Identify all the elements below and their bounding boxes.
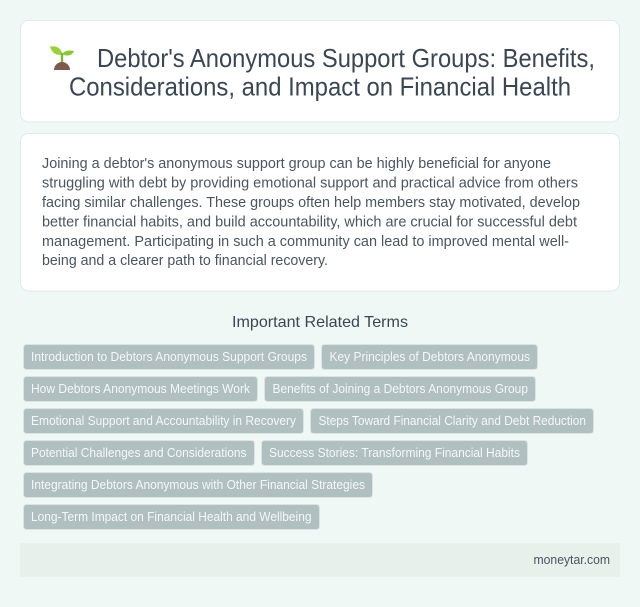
tag list: Long-Term Impact on Financial Health and Wellbeing — [31, 510, 312, 524]
panel: title card — [20, 20, 620, 122]
text block: description: struggling with debt by providing emotional support and practical advice from others — [42, 176, 578, 192]
heading: related terms: Important Related Terms — [232, 314, 408, 331]
tag list: Potential Challenges and Considerations — [31, 446, 246, 460]
text block: description: management. Participating in such a community can lead to improved mental well- — [42, 234, 569, 250]
text block: description: Joining a debtor's anonymous support group can be highly beneficial for anyone — [42, 156, 551, 172]
title: Considerations, and Impact on Financial Health — [69, 74, 571, 102]
tag list: Integrating Debtors Anonymous with Other Financial Strategies — [31, 478, 365, 492]
title: Debtor's Anonymous Support Groups: Benefits, — [97, 45, 595, 73]
tag list — [24, 344, 594, 530]
panel: description — [20, 134, 620, 291]
tag list: Success Stories: Transforming Financial Habits — [269, 446, 520, 460]
tag list: Emotional Support and Accountability in Recovery — [31, 414, 297, 428]
text block: description — [42, 156, 580, 269]
icon: seedling — [50, 46, 74, 70]
title — [69, 45, 595, 102]
text block: description: facing similar challenges. These groups often help members stay motivated, develop — [42, 195, 580, 211]
tag list: Introduction to Debtors Anonymous Support Groups — [31, 350, 307, 364]
tag list: How Debtors Anonymous Meetings Work — [31, 382, 251, 396]
text block: description: better financial habits, and build accountability, which are crucial for successful debt — [42, 214, 577, 230]
text block: description: being and a clearer path to financial recovery. — [42, 253, 328, 269]
tag list: Key Principles of Debtors Anonymous — [330, 350, 530, 364]
tag list: Benefits of Joining a Debtors Anonymous Group — [272, 382, 528, 396]
footer: moneytar.com — [534, 553, 610, 567]
tag list: Steps Toward Financial Clarity and Debt Reduction — [318, 414, 586, 428]
footer — [20, 543, 620, 577]
